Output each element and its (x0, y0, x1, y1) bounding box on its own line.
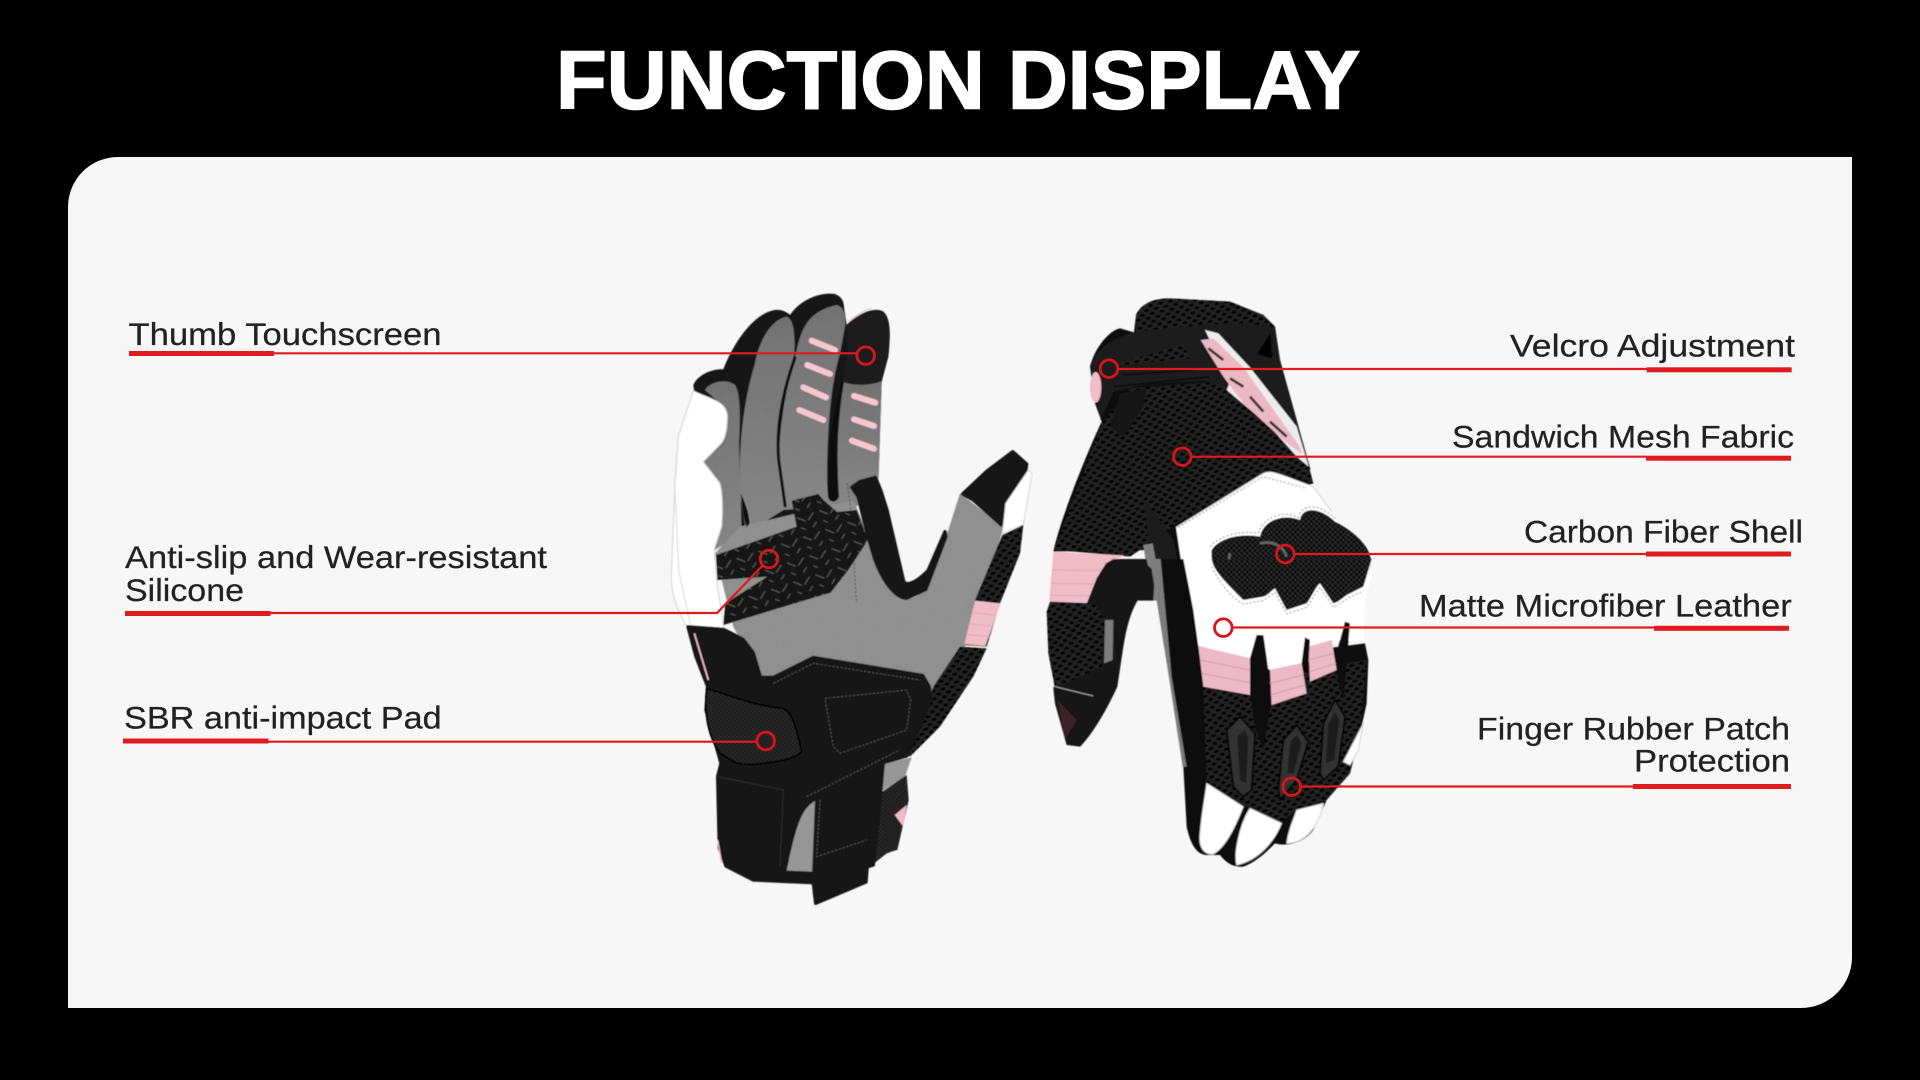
label: SBR anti-impact Pad (124, 699, 442, 735)
callout: Sandwich Mesh Fabric (1174, 419, 1794, 466)
callout: Matte Microfiber Leather (1214, 588, 1792, 636)
callout: Thumb Touchscreen (128, 316, 874, 365)
leader line (1191, 456, 1791, 461)
leader line (1300, 784, 1791, 789)
glove lower: fingers, pink bands, rubber guards and thumb (1047, 559, 1372, 867)
callout: Carbon Fiber Shell (1276, 514, 1803, 563)
label: Thumb Touchscreen (128, 316, 442, 352)
icon: back-of-hand glove (1047, 298, 1372, 867)
marker (1174, 448, 1191, 466)
glove palm upper: fingers, palm and thumb (671, 294, 1032, 703)
label: Silicone (125, 572, 244, 608)
leader line (1294, 552, 1791, 556)
glove cuff: padded wrist and velcro strap (688, 627, 987, 903)
callout: Anti-slip and Wear-resistant Silicone (125, 539, 778, 616)
leader line (1232, 626, 1789, 631)
label: Anti-slip and Wear-resistant (125, 539, 547, 575)
callout: SBR anti-impact Pad (123, 699, 774, 750)
marker (757, 732, 774, 750)
label: Sandwich Mesh Fabric (1452, 419, 1794, 455)
label: Carbon Fiber Shell (1524, 514, 1803, 550)
marker (1283, 778, 1300, 796)
icon: palm-side glove (671, 294, 1032, 903)
leader line (123, 738, 757, 744)
marker (1100, 360, 1118, 378)
callout: Finger Rubber Patch Protection (1283, 710, 1791, 796)
glove upper: cuff, mesh and knuckle shell (1049, 298, 1372, 602)
marker (760, 550, 778, 568)
label: Velcro Adjustment (1510, 328, 1795, 364)
label: Finger Rubber Patch (1477, 710, 1790, 746)
leader line (129, 351, 856, 356)
callout: Velcro Adjustment (1100, 328, 1795, 378)
label: Protection (1634, 743, 1790, 779)
marker (1276, 545, 1294, 563)
title: FUNCTION DISPLAY (556, 34, 1360, 126)
panel: light background card (68, 157, 1852, 1008)
marker (857, 347, 874, 365)
label: Matte Microfiber Leather (1419, 588, 1792, 624)
marker (1214, 619, 1232, 636)
leader line (1118, 367, 1792, 372)
leader line (125, 565, 763, 616)
